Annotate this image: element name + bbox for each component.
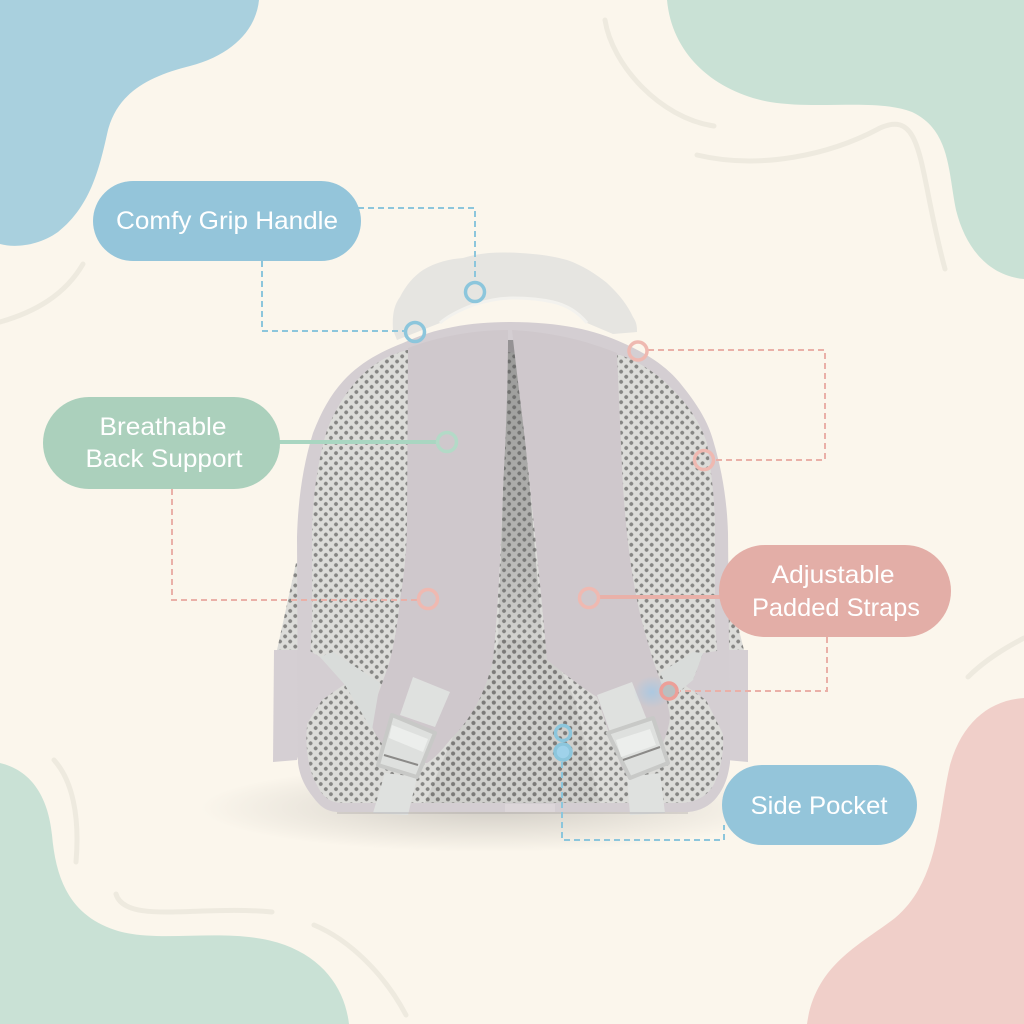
left side flap (305, 650, 345, 727)
bottom edge (337, 812, 688, 814)
blob: bottom left green (0, 763, 349, 1024)
blob: top right green (667, 0, 1024, 279)
connector: comfy grip handle (262, 208, 475, 331)
slit shading (497, 340, 545, 670)
label: comfy grip handle (93, 181, 361, 261)
label: adjustable padded straps: Padded Straps (752, 594, 920, 622)
body shell (297, 322, 730, 812)
label: comfy grip handle: Comfy Grip Handle (116, 207, 338, 235)
bottom trim (505, 804, 555, 812)
left side webbing (320, 652, 380, 730)
label: breathable back support: Back Support (86, 445, 243, 473)
left side pocket (277, 563, 303, 650)
blob: bottom right pink (807, 698, 1024, 1024)
callout markers (406, 282, 714, 760)
back mesh panel (306, 350, 723, 803)
label: breathable back support (43, 397, 280, 489)
connector: breathable (172, 442, 437, 600)
left strap webbing lower (373, 773, 417, 815)
label: adjustable padded straps: Adjustable (772, 561, 894, 589)
left buckle (378, 715, 435, 777)
handle (393, 253, 637, 340)
right side webbing (660, 652, 703, 697)
left shoulder strap (370, 330, 508, 763)
connector: straps (599, 350, 827, 691)
connector: side pocket (562, 762, 724, 840)
right shoulder strap (512, 330, 670, 770)
handle edge (440, 298, 587, 323)
right strap webbing upper (597, 682, 647, 732)
label: side pocket: Side Pocket (750, 792, 888, 820)
right side pocket (718, 563, 744, 650)
left strap webbing upper (400, 677, 450, 727)
right strap webbing lower (627, 773, 665, 815)
label: side pocket (722, 765, 917, 845)
right buckle (608, 718, 668, 778)
ground shadow (200, 764, 780, 852)
central mesh (425, 640, 600, 803)
blob: top left blue (0, 0, 259, 246)
label: breathable back support: Breathable (100, 413, 226, 441)
right side flap (683, 650, 724, 736)
blue smudge (634, 676, 670, 708)
label: adjustable padded straps (719, 545, 951, 637)
backpack (273, 253, 748, 815)
